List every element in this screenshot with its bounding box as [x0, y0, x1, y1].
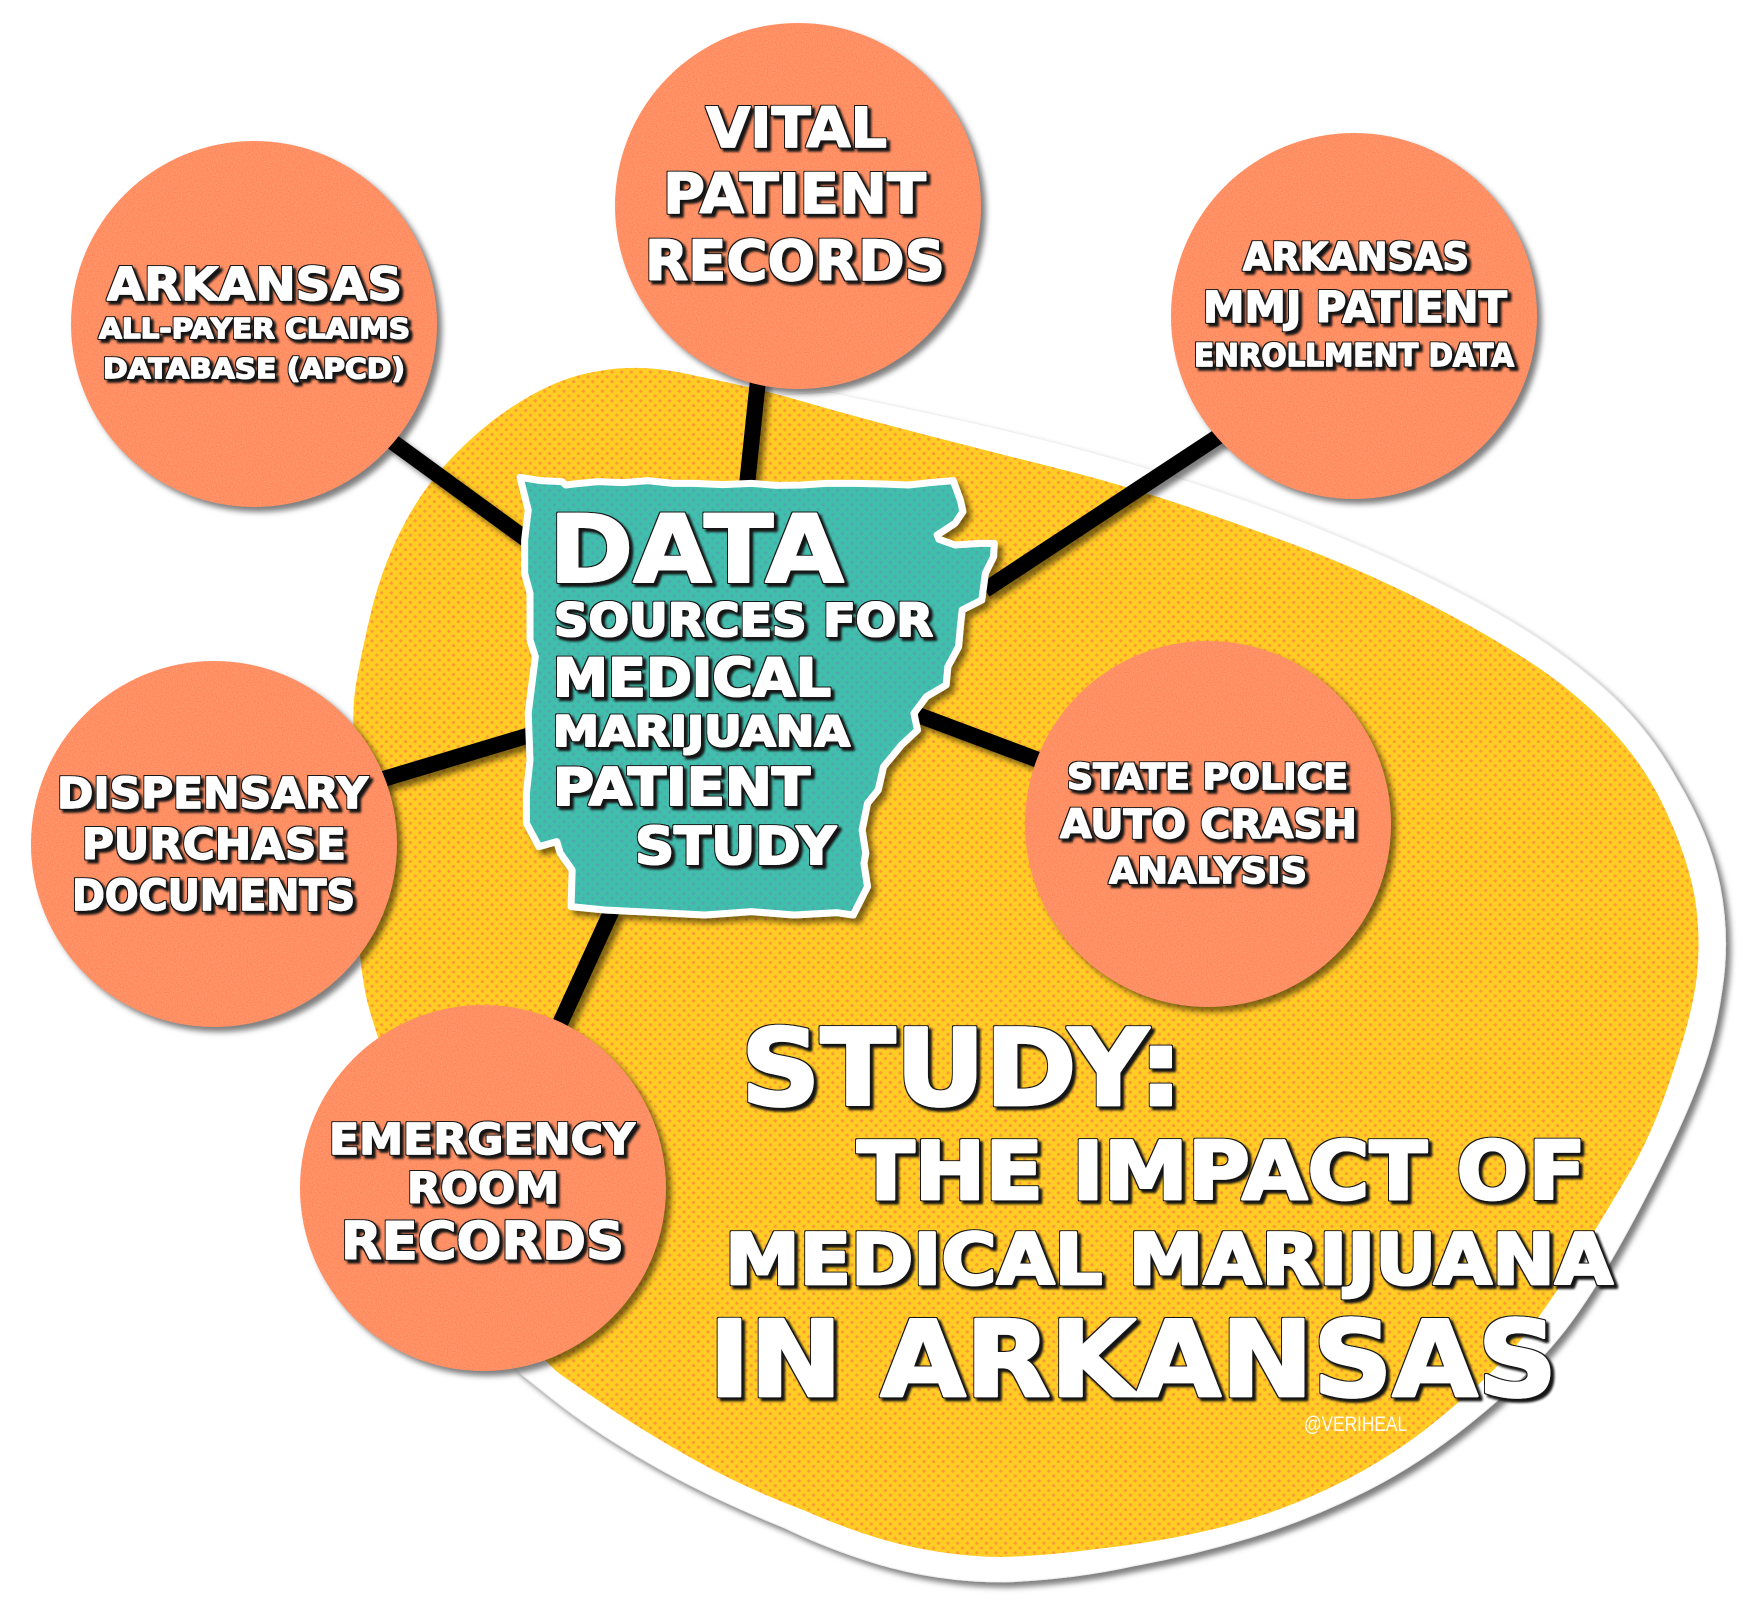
label: PURCHASE: [82, 820, 346, 870]
node: Vital patient records: [615, 23, 981, 389]
yellow halftone blob: [353, 368, 1699, 1557]
label: [57, 769, 369, 921]
main title: STUDY:: [741, 1007, 1183, 1130]
label: ENROLLMENT DATA: [1194, 338, 1514, 374]
circle: [1171, 133, 1537, 499]
main title: [709, 1007, 1613, 1421]
label: [1060, 757, 1357, 892]
node: Emergency room records: [300, 1005, 666, 1371]
label: DATABASE (APCD): [103, 352, 405, 385]
label: [329, 1115, 636, 1272]
state title text: DATA: [549, 496, 844, 605]
main title: MEDICAL MARIJUANA: [725, 1219, 1613, 1301]
credit: @VERIHEAL: [1304, 1413, 1407, 1436]
white blob backing: [500, 392, 1726, 1582]
label: VITAL: [706, 96, 887, 160]
state title text: MEDICAL: [553, 648, 831, 709]
label: ARKANSAS: [107, 258, 402, 311]
node: State police auto crash analysis: [1025, 641, 1391, 1007]
label: ARKANSAS: [1243, 235, 1469, 279]
label: DISPENSARY: [57, 769, 369, 819]
circle: [71, 141, 437, 507]
state shape: [520, 477, 994, 915]
node: Arkansas MMJ patient enrollment data: [1171, 133, 1537, 499]
Arkansas state panel: [520, 477, 994, 915]
label: AUTO CRASH: [1060, 802, 1357, 848]
circle: [300, 1005, 666, 1371]
circle: [615, 23, 981, 389]
label: EMERGENCY: [329, 1115, 636, 1165]
state title text: MARIJUANA: [553, 707, 851, 756]
label: PATIENT: [663, 162, 927, 226]
connector lines: [380, 380, 1222, 1030]
label: ALL-PAYER CLAIMS: [99, 312, 410, 345]
circle: [1025, 641, 1391, 1007]
node: Dispensary purchase documents: [31, 661, 397, 1027]
label: [1194, 235, 1514, 374]
label: MMJ PATIENT: [1203, 283, 1508, 333]
main title: IN ARKANSAS: [709, 1299, 1557, 1421]
label: RECORDS: [645, 229, 945, 293]
state title text: PATIENT: [553, 758, 811, 818]
state title text: [549, 496, 933, 877]
state title text: SOURCES FOR: [554, 594, 933, 647]
state title text: STUDY: [635, 817, 837, 877]
label: [645, 96, 945, 293]
label: [99, 258, 410, 385]
label: DOCUMENTS: [72, 871, 355, 921]
label: ROOM: [407, 1164, 559, 1214]
node: Arkansas APCD: [71, 141, 437, 507]
circle: [31, 661, 397, 1027]
label: ANALYSIS: [1109, 851, 1307, 892]
label: STATE POLICE: [1067, 757, 1348, 798]
label: RECORDS: [341, 1212, 624, 1272]
main title: THE IMPACT OF: [857, 1125, 1586, 1218]
